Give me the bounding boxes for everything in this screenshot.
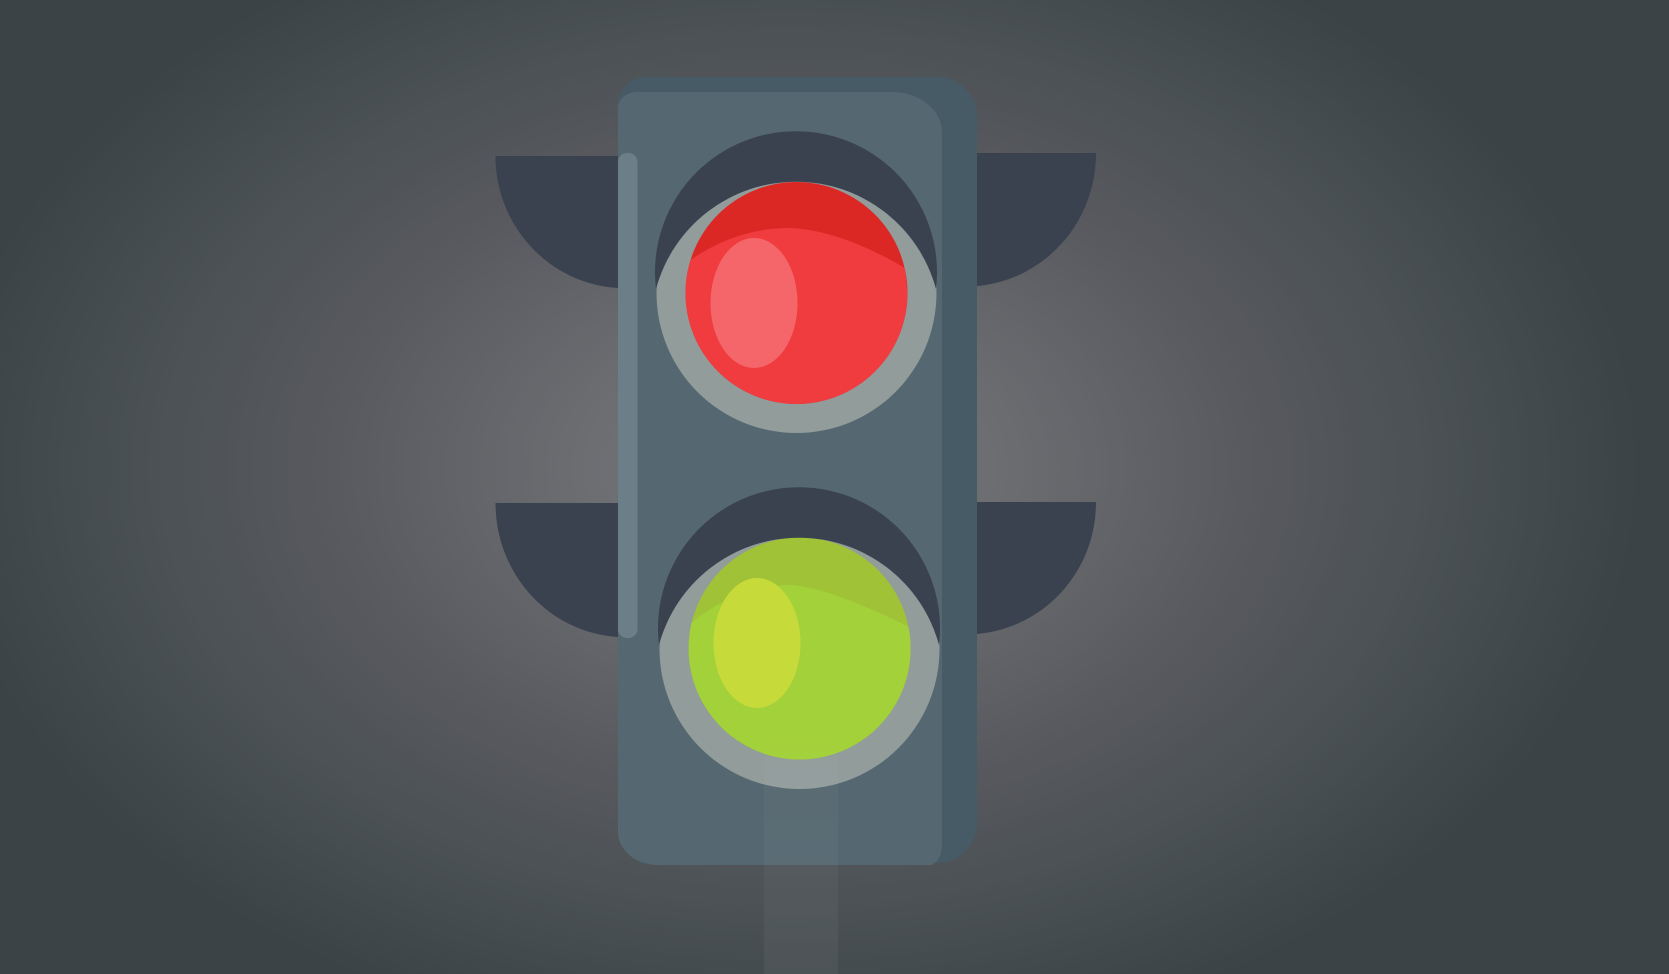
green signal lens xyxy=(689,538,911,760)
pole xyxy=(764,735,838,974)
housing back xyxy=(618,77,977,863)
red lens highlight xyxy=(710,238,798,368)
red lens bright area xyxy=(686,228,908,404)
green signal bezel xyxy=(660,509,940,789)
red signal hood xyxy=(655,131,937,289)
lower visors xyxy=(495,502,1096,637)
side highlight bar xyxy=(618,153,638,638)
green signal hood xyxy=(658,487,940,645)
green lens bright area xyxy=(688,585,911,760)
red signal lens xyxy=(686,182,908,404)
upper visors xyxy=(495,153,1096,288)
red signal bezel xyxy=(656,153,936,433)
green lens highlight xyxy=(714,578,800,708)
housing front xyxy=(618,92,942,865)
green signal xyxy=(658,487,940,789)
red signal xyxy=(655,131,937,433)
